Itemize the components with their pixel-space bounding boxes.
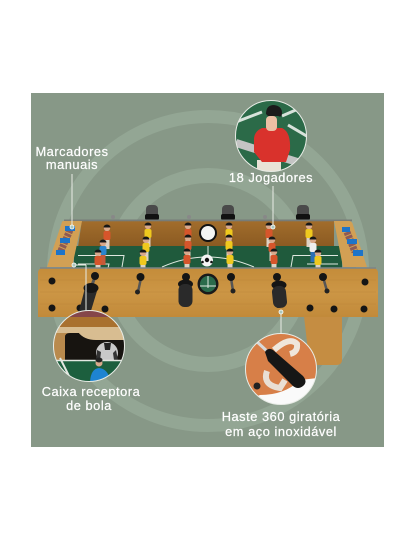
photo: player — [236, 101, 306, 171]
callout: 18 Jogadores: 18 Jogadores — [229, 170, 313, 185]
back wall — [78, 220, 334, 247]
back handles — [111, 205, 310, 220]
callout: Haste 360 giratória: em aço inoxidável — [225, 424, 337, 439]
side rails with manual scoreboards — [47, 221, 367, 267]
foosball table — [38, 205, 378, 317]
front panel — [38, 268, 378, 317]
photo: ball box — [53, 310, 125, 384]
callout: 18 Jogadores — [229, 100, 313, 229]
callout: Marcadores manuais: Marcadores — [35, 144, 109, 159]
callout: Caixa receptora de bola: de bola — [66, 398, 112, 413]
callout: Marcadores manuais: manuais — [46, 157, 98, 172]
bolts — [48, 278, 368, 312]
panel: background — [31, 93, 384, 447]
playing field — [74, 246, 342, 268]
photo: rotating rod — [245, 333, 318, 405]
callout: Caixa receptora de bola — [42, 263, 141, 413]
score window — [199, 224, 217, 242]
ball — [201, 254, 213, 266]
front handles and rods — [79, 272, 330, 314]
table leg — [304, 316, 342, 365]
callout: Haste 360 giratória: Haste 360 giratória — [222, 409, 341, 424]
callout: Caixa receptora de bola: Caixa receptora — [42, 384, 141, 399]
goal window — [198, 274, 218, 294]
callout: Haste 360 giratória — [222, 310, 341, 439]
players — [94, 222, 322, 274]
callout: Marcadores manuais — [35, 144, 109, 229]
